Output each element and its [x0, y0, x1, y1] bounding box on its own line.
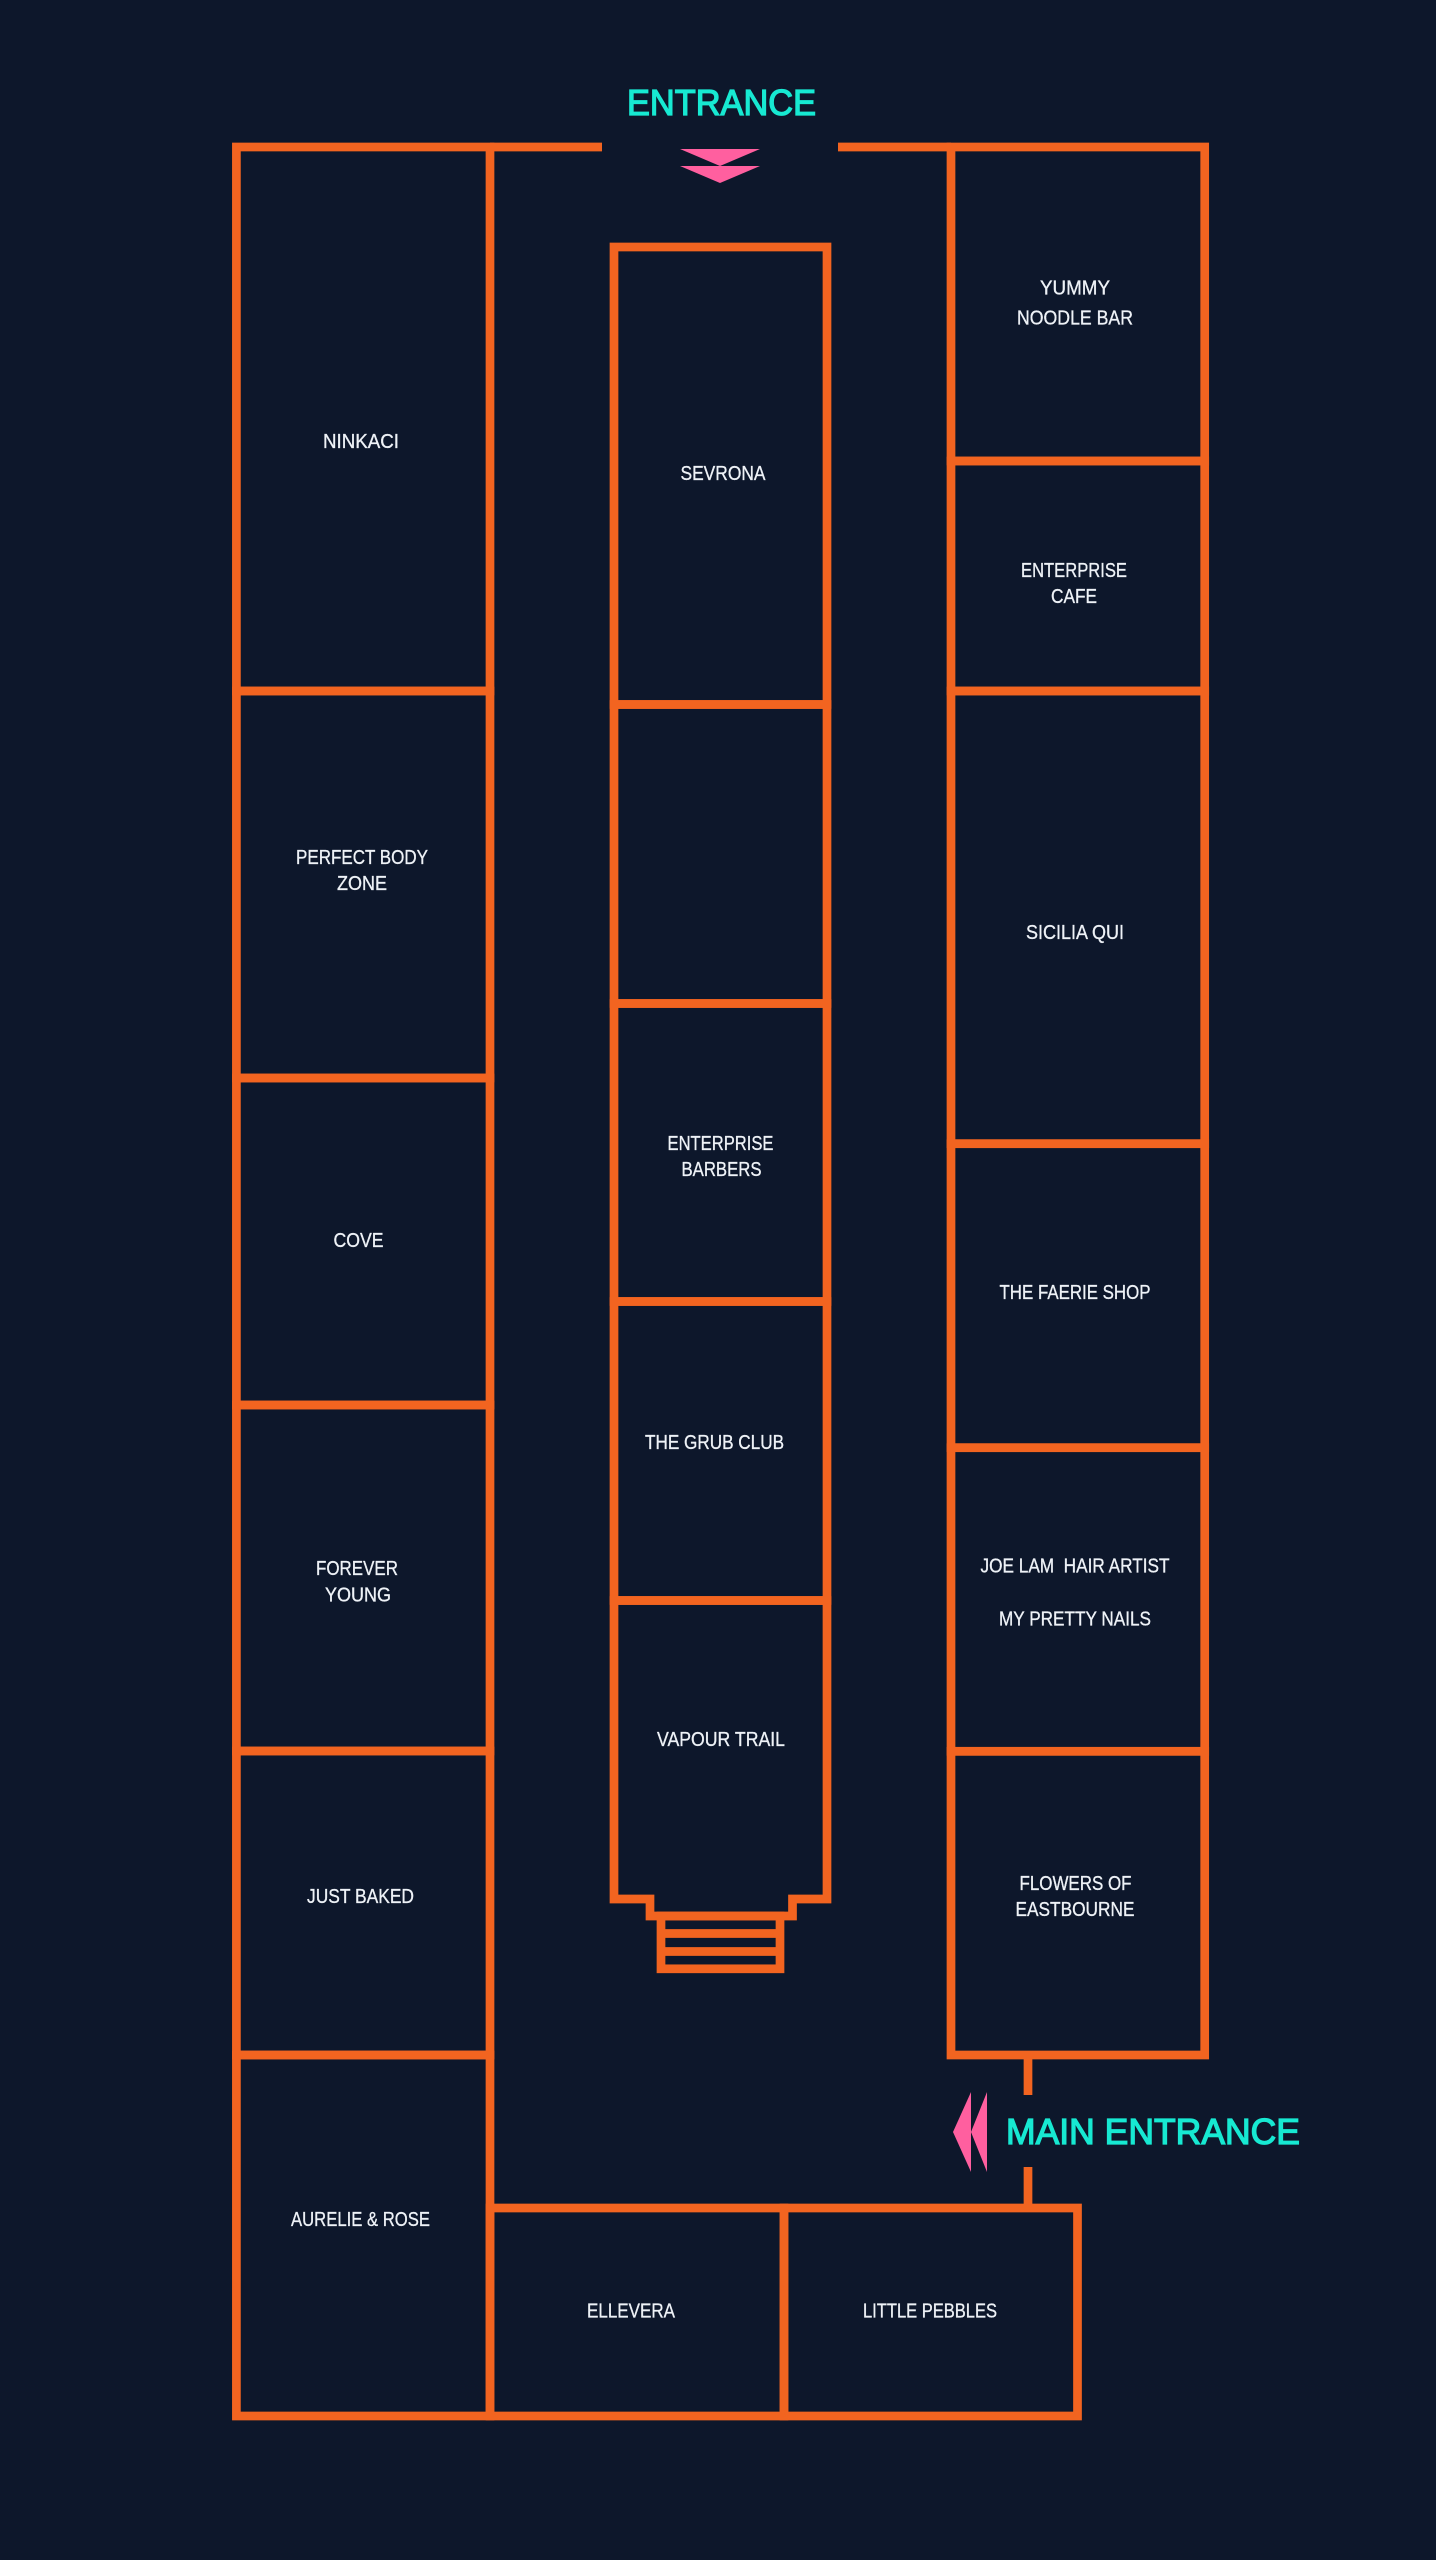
room: Sevrona: SEVRONA: [680, 463, 766, 485]
room: Forever Young: FOREVER: [316, 1558, 398, 1580]
room: Aurelie & Rose: [236, 2055, 490, 2416]
icon: main entrance arrows: [953, 2092, 987, 2172]
room: Sicilia Qui: [951, 691, 1205, 1144]
room: Ninkaci: [236, 147, 490, 691]
room: Perfect Body Zone: ZONE: [337, 873, 387, 895]
room: Yummy Noodle Bar: YUMMY: [1040, 278, 1110, 300]
room: Joe Lam Hair Artist and My Pretty Nails: JOE LAM HAIR ARTIST: [980, 1556, 1170, 1578]
room: Vapour Trail: [614, 1600, 827, 1916]
room: Little Pebbles: LITTLE PEBBLES: [863, 2300, 997, 2322]
room: Sevrona: [614, 247, 827, 704]
top wall: right segment: [838, 143, 951, 151]
room: Joe Lam Hair Artist and My Pretty Nails: MY PRETTY NAILS: [999, 1608, 1151, 1630]
room: Ellevera: ELLEVERA: [587, 2300, 676, 2322]
top wall: left segment: [490, 143, 602, 151]
room: Just Baked: JUST BAKED: [307, 1886, 414, 1908]
room: Ninkaci: NINKACI: [323, 431, 399, 453]
room: Forever Young: YOUNG: [325, 1584, 391, 1606]
heading: entrance: ENTRANCE: [627, 82, 816, 123]
room: Sicilia Qui: SICILIA QUI: [1026, 922, 1124, 944]
room: unnamed unit: [614, 704, 827, 1004]
wall stub: above main entrance: [1024, 2059, 1032, 2095]
room: Flowers of Eastbourne: [951, 1751, 1205, 2055]
room: Enterprise Barbers: [614, 1004, 827, 1302]
room: Forever Young: [236, 1405, 490, 1751]
wall stub: below main entrance: [1024, 2167, 1032, 2208]
room: The Grub Club: [614, 1302, 827, 1600]
room: The Faerie Shop: [951, 1144, 1205, 1448]
icon: stairs: [661, 1916, 780, 1969]
room: Enterprise Cafe: [951, 461, 1205, 691]
room: Enterprise Barbers: BARBERS: [682, 1159, 762, 1181]
room: Flowers of Eastbourne: FLOWERS OF: [1020, 1873, 1132, 1895]
room: Little Pebbles: [784, 2208, 1078, 2416]
room: Perfect Body Zone: PERFECT BODY: [296, 847, 428, 869]
room: Cove: [236, 1078, 490, 1405]
room: Yummy Noodle Bar: NOODLE BAR: [1017, 308, 1133, 330]
icon: entrance arrows: [680, 149, 760, 183]
room: The Faerie Shop: THE FAERIE SHOP: [1000, 1282, 1150, 1304]
room: Cove: COVE: [334, 1230, 384, 1252]
room: Yummy Noodle Bar: [951, 147, 1205, 461]
heading: main entrance: MAIN ENTRANCE: [1006, 2111, 1300, 2152]
room: Vapour Trail: VAPOUR TRAIL: [657, 1729, 785, 1751]
room: Enterprise Cafe: ENTERPRISE: [1021, 560, 1127, 582]
room: Just Baked: [236, 1751, 490, 2055]
room: The Grub Club: THE GRUB CLUB: [645, 1432, 784, 1454]
room: Aurelie & Rose: AURELIE & ROSE: [291, 2209, 430, 2231]
room: Perfect Body Zone: [236, 691, 490, 1078]
room: Joe Lam Hair Artist and My Pretty Nails: [951, 1448, 1205, 1751]
room: Enterprise Barbers: ENTERPRISE: [668, 1133, 774, 1155]
room: Flowers of Eastbourne: EASTBOURNE: [1016, 1899, 1134, 1921]
room: Ellevera: [490, 2208, 784, 2416]
room: Enterprise Cafe: CAFE: [1051, 586, 1097, 608]
